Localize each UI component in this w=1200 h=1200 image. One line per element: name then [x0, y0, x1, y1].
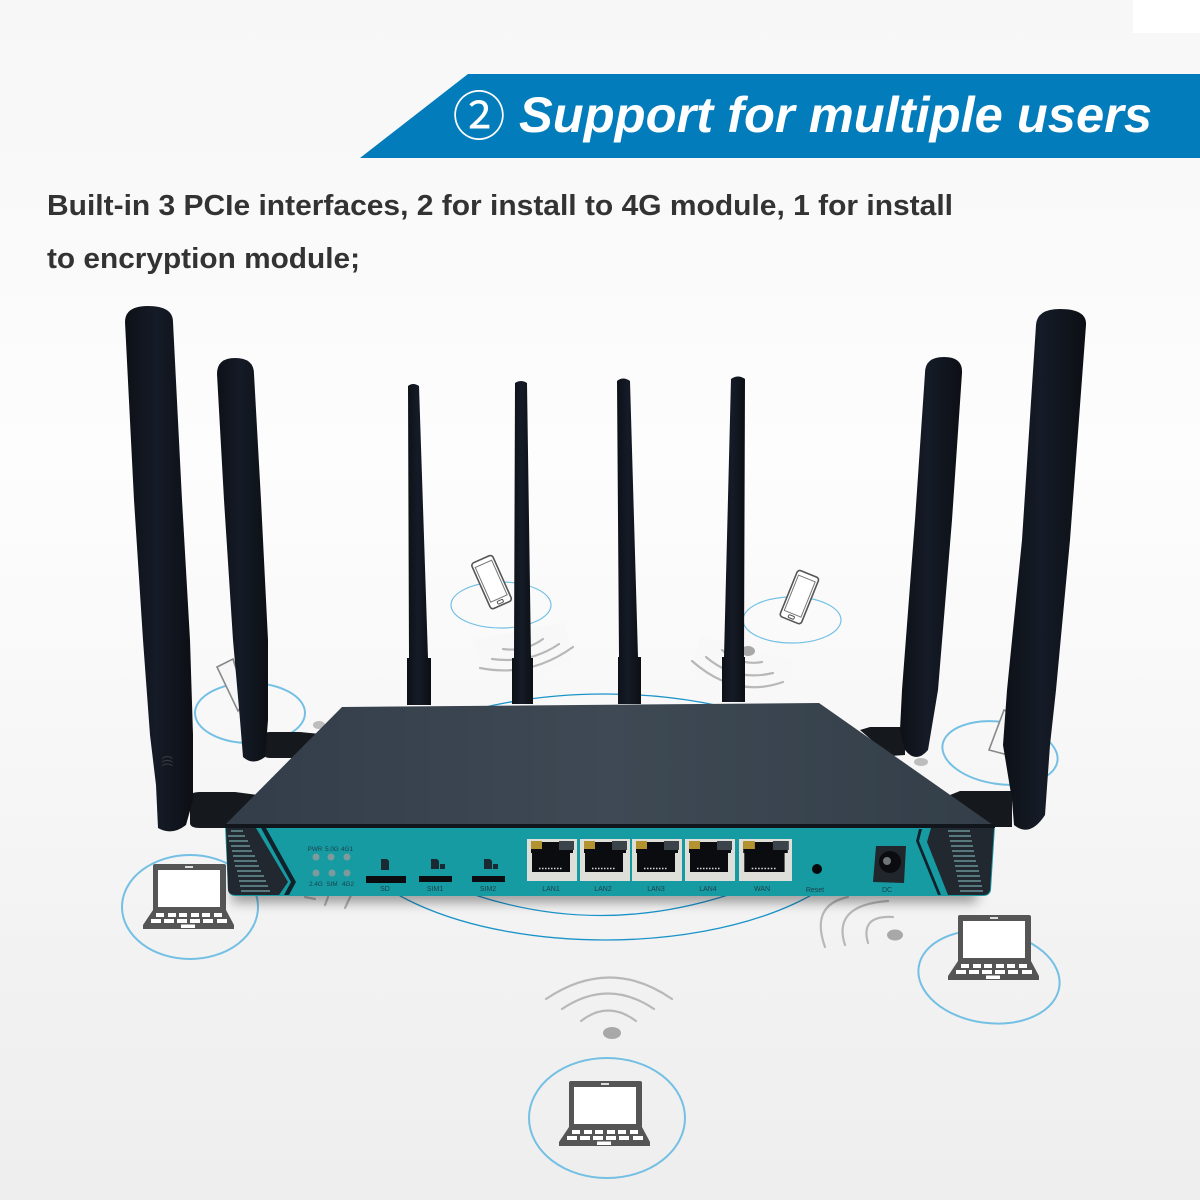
wifi: under router left	[305, 893, 352, 908]
ethernet ports	[527, 839, 792, 881]
wifi: bottom	[546, 978, 672, 1039]
panel labels: Reset	[806, 887, 824, 894]
panel labels: 5.0G	[325, 846, 339, 853]
banner heading: Support for multiple users	[519, 87, 1152, 143]
antenna connectors	[190, 727, 1012, 828]
title banner	[360, 74, 1200, 158]
panel labels: SIM2	[480, 886, 496, 893]
wifi: right	[821, 897, 903, 947]
panel labels: WAN	[754, 886, 770, 893]
icon: phone right	[779, 570, 819, 625]
wifi: upper right	[691, 637, 794, 692]
antenna wifi mark: )))	[161, 756, 173, 766]
wifi dot: right	[914, 758, 928, 766]
antenna 1	[125, 306, 193, 831]
large antennas	[125, 306, 1086, 831]
panel labels: SIM	[326, 881, 338, 888]
panel labels: LAN4	[699, 886, 717, 893]
wifi: upper left	[473, 622, 574, 690]
description text: to encryption module;	[47, 243, 360, 275]
laptops	[143, 864, 1039, 1146]
connector right front	[950, 791, 1012, 827]
banner number: ②	[452, 75, 506, 151]
antenna 2	[217, 358, 268, 762]
connector left front	[190, 792, 258, 828]
wifi signals	[305, 622, 928, 1039]
icon: phone left	[471, 555, 512, 610]
device coverage ellipses	[122, 582, 1066, 1178]
phones	[217, 555, 1015, 755]
panel labels: DC	[882, 887, 892, 894]
router front panel	[225, 824, 995, 896]
antenna 6	[722, 376, 745, 702]
icon: phone behind right antenna	[989, 710, 1015, 755]
panel labels: LAN3	[647, 886, 665, 893]
panel labels: LAN1	[542, 886, 560, 893]
connector right rear	[860, 727, 905, 756]
icon: phone behind left antenna	[217, 659, 246, 711]
wifi dot: left	[313, 721, 325, 729]
panel labels: SIM1	[427, 886, 443, 893]
antenna 4	[512, 381, 533, 704]
icon: laptop left	[143, 864, 234, 929]
card slots	[366, 859, 505, 883]
router top surface	[225, 703, 993, 825]
panel right end cap	[916, 828, 994, 895]
router shadow	[232, 888, 977, 902]
panel labels: SD	[380, 886, 390, 893]
panel left end cap	[226, 828, 296, 895]
antenna 3	[407, 384, 431, 705]
panel labels: 4G1	[341, 846, 353, 853]
icon: laptop right	[948, 915, 1039, 980]
icon: laptop bottom	[559, 1081, 650, 1146]
reset button	[812, 864, 822, 874]
antenna 5	[617, 378, 641, 704]
top-right white patch	[1133, 0, 1200, 33]
antenna 7	[900, 357, 962, 757]
thin antennas	[407, 376, 745, 705]
panel labels: PWR	[308, 846, 323, 853]
description text: Built-in 3 PCIe interfaces, 2 for install to 4G module, 1 for install	[47, 190, 953, 222]
description text	[47, 190, 953, 275]
panel labels	[308, 846, 892, 894]
panel labels: 2.4G	[309, 881, 323, 888]
DC jack	[873, 846, 906, 883]
panel labels: LAN2	[594, 886, 612, 893]
antenna 8	[1003, 309, 1086, 830]
panel labels: 4G2	[342, 881, 354, 888]
connector left rear	[263, 732, 320, 758]
router	[225, 703, 995, 896]
status LEDs	[312, 854, 350, 876]
